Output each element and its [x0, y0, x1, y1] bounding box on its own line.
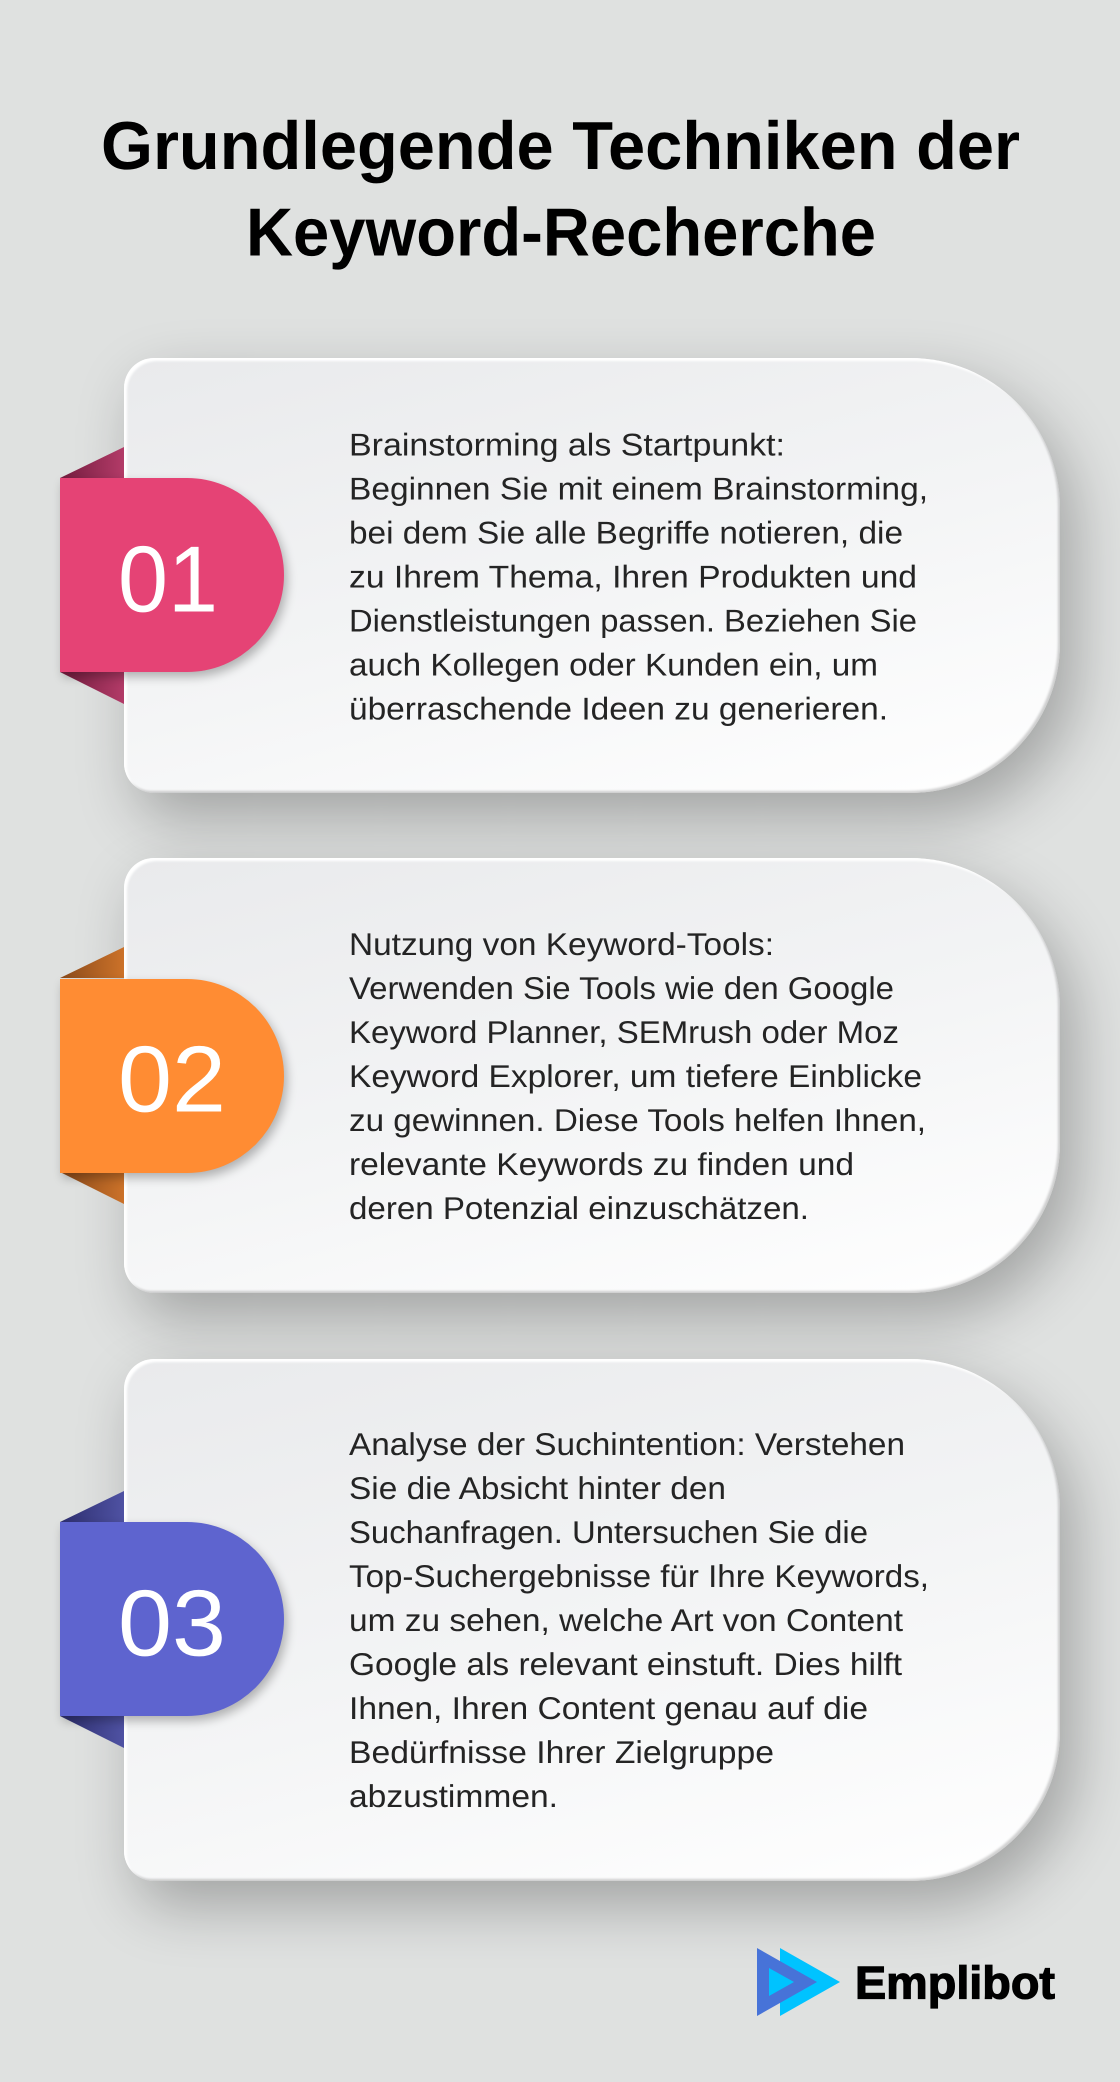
number 01: 01	[118, 526, 218, 632]
panel: Brainstorming als Startpunkt	[58, 350, 1106, 848]
title: Grundlegende Techniken der	[101, 108, 1020, 184]
text block: Verwenden Sie Tools wie den Google	[349, 970, 894, 1006]
text block: bei dem Sie alle Begriffe notieren, die	[349, 514, 903, 550]
ribbon folds	[60, 447, 124, 704]
text block: Top-Suchergebnisse für Ihre Keywords,	[349, 1558, 929, 1594]
wordmark: Emplibot	[855, 1956, 1055, 2008]
card background	[124, 858, 1060, 1293]
card background	[124, 1359, 1060, 1881]
icon: play triangles	[757, 1948, 840, 2016]
text block: auch Kollegen oder Kunden ein, um	[349, 646, 878, 682]
ribbon folds	[60, 1491, 124, 1748]
text block: Nutzung von Keyword-Tools:	[349, 926, 774, 962]
number 02: 02	[118, 1026, 226, 1132]
panel: Analyse der Suchintention	[58, 1352, 1106, 1936]
text block: Google als relevant einstuft. Dies hilft	[349, 1646, 902, 1682]
text block: relevante Keywords zu finden und	[349, 1146, 854, 1182]
text block: deren Potenzial einzuschätzen.	[349, 1190, 809, 1226]
text block: Dienstleistungen passen. Beziehen Sie	[349, 602, 917, 638]
text block: Analyse der Suchintention: Verstehen	[349, 1426, 905, 1462]
text block: Sie die Absicht hinter den	[349, 1470, 726, 1506]
panel: Nutzung von Keyword-Tools	[58, 850, 1106, 1348]
number 03: 03	[118, 1570, 226, 1676]
text block: Keyword Planner, SEMrush oder Moz	[349, 1014, 899, 1050]
ribbon folds	[60, 947, 124, 1204]
number badge 02	[60, 979, 284, 1173]
text block: abzustimmen.	[349, 1778, 558, 1814]
text block: Beginnen Sie mit einem Brainstorming,	[349, 470, 928, 506]
text block	[349, 426, 928, 726]
text block: um zu sehen, welche Art von Content	[349, 1602, 903, 1638]
text block: Brainstorming als Startpunkt:	[349, 426, 785, 462]
title	[101, 108, 1020, 270]
text block: Ihnen, Ihren Content genau auf die	[349, 1690, 868, 1726]
text block: überraschende Ideen zu generieren.	[349, 690, 888, 726]
text block: Bedürfnisse Ihrer Zielgruppe	[349, 1734, 774, 1770]
text block	[349, 926, 926, 1226]
logo: Emplibot	[757, 1948, 1055, 2016]
text block: Keyword Explorer, um tiefere Einblicke	[349, 1058, 922, 1094]
number badge 01	[60, 478, 284, 672]
text block: Suchanfragen. Untersuchen Sie die	[349, 1514, 868, 1550]
card background	[124, 358, 1060, 793]
text block	[349, 1426, 929, 1814]
text block: zu gewinnen. Diese Tools helfen Ihnen,	[349, 1102, 926, 1138]
title: Keyword-Recherche	[246, 194, 876, 270]
text block: zu Ihrem Thema, Ihren Produkten und	[349, 558, 917, 594]
number badge 03	[60, 1522, 284, 1716]
